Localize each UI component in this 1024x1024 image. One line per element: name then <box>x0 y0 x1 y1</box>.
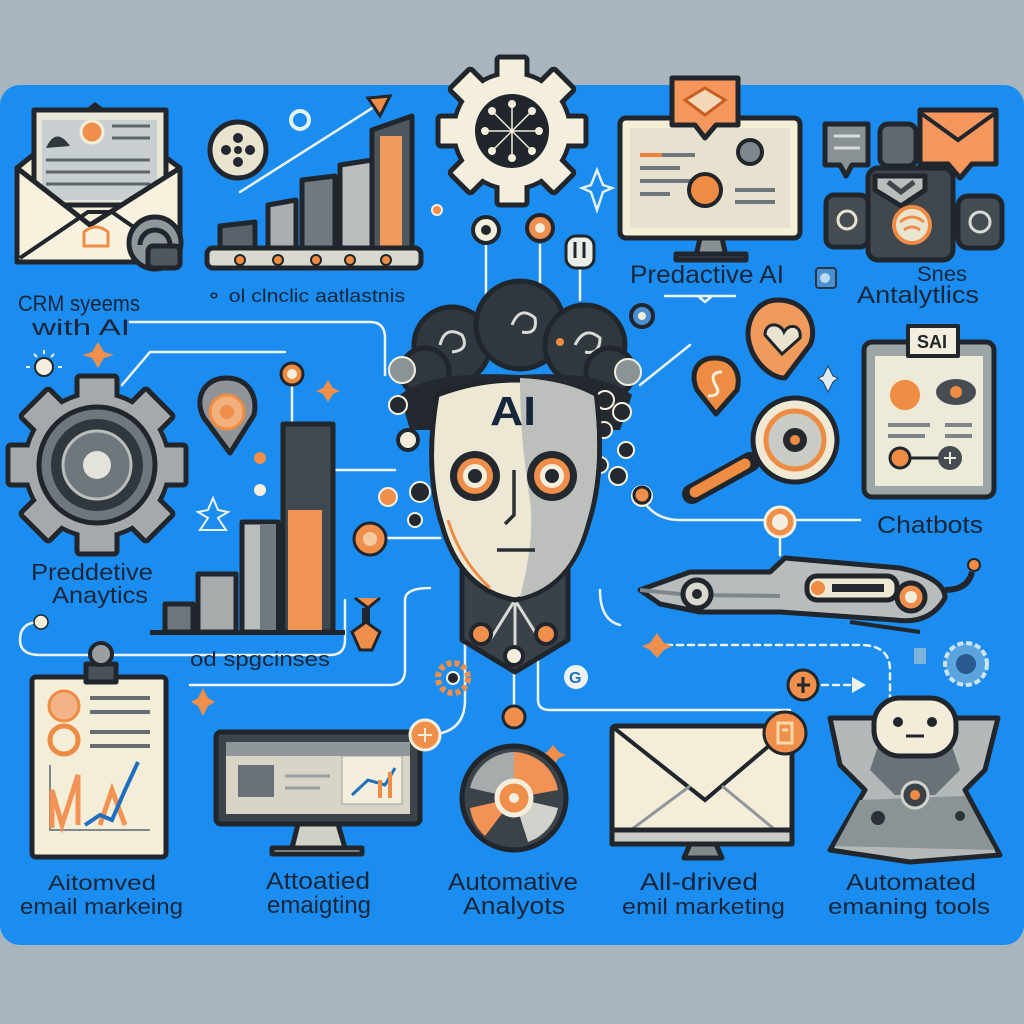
heading: Preddetive Anaytics: Anaytics <box>52 582 148 608</box>
icon: pie disc <box>462 746 566 850</box>
heading: Preddetive Anaytics: Preddetive <box>31 559 153 585</box>
heading: Aitomved email marketing <box>20 872 183 919</box>
neck nodes <box>471 624 556 665</box>
icon: robot machine <box>830 698 1000 862</box>
AI robot head <box>379 281 652 672</box>
icon: tool device <box>640 558 980 632</box>
small square icon <box>816 268 836 288</box>
icon: apps cluster <box>825 110 1002 260</box>
icon: gear left <box>8 376 186 554</box>
icon: blue gear badge <box>914 643 987 685</box>
icon: pin small <box>694 358 738 414</box>
connector lines <box>20 245 890 735</box>
eyes <box>450 451 577 501</box>
heading: Aitomved email marketing: Aitomved <box>48 872 156 895</box>
icon: envelope monitor <box>612 712 806 858</box>
heading: Predactive AI: Predactive AI <box>630 261 784 289</box>
heading: Automated emaning tools: Automated <box>846 869 976 895</box>
label: od specinses: od spgcinses <box>190 649 330 671</box>
icons: left small accents <box>26 342 340 530</box>
icon: tablet SAI: SAI <box>917 332 947 352</box>
heading: Snes Analytlics: Snes <box>917 263 967 286</box>
heading: Attoatied emaigting: emaigting <box>267 892 371 919</box>
heading: All-drived emil marketing: emil marketing <box>622 894 785 919</box>
icon: monitor left <box>216 732 420 854</box>
arrowhead <box>852 677 866 693</box>
heading: CRM systems with AI <box>18 291 140 340</box>
AI text: AI <box>490 388 536 434</box>
heading: Snes Analytlics <box>857 263 979 309</box>
heading: Preddetive Anaytics <box>31 559 153 608</box>
heading: Automated emaning tools: emaning tools <box>828 894 990 919</box>
left bottom accents <box>410 633 818 765</box>
heading: Attoatied emaigting <box>266 868 371 919</box>
icon: magnifier <box>692 398 837 494</box>
heading: Automated emaning tools <box>828 869 990 919</box>
face <box>432 380 600 600</box>
node <box>281 363 303 385</box>
chart: growth bars on conveyor <box>207 96 421 268</box>
node <box>354 523 386 555</box>
icon: predictive AI monitor <box>620 78 800 260</box>
heading: Chatbots: Chatbots <box>877 512 983 539</box>
neck <box>462 570 568 672</box>
heading: All-drived emil marketing: All-drived <box>640 869 758 896</box>
side beads <box>379 357 652 527</box>
node <box>634 487 795 537</box>
icon: envelope CRM <box>17 105 181 269</box>
heading: Snes Analytlics: Antalytlics <box>857 282 979 309</box>
head curls <box>400 281 634 430</box>
left bottom accents: G <box>569 670 581 687</box>
icon: top gear <box>438 57 586 205</box>
heading: Automative Analyots: Automative <box>448 869 578 896</box>
small sparkle <box>582 170 612 210</box>
icon: tablet SAI <box>864 326 994 497</box>
sparkle <box>818 366 838 392</box>
connector nodes <box>432 205 594 268</box>
icon: pin <box>200 378 255 453</box>
icon: small bow figure <box>352 598 380 650</box>
heading: CRM systems with AI: CRM syeems <box>18 291 140 316</box>
chart: predictive bars <box>150 424 345 635</box>
nose and mouth <box>497 470 535 550</box>
heading: Automative Analyots <box>448 869 578 920</box>
label: clinic analytics: ⚬ ol clnclic aatlastnis <box>205 286 405 306</box>
small circle node <box>631 305 653 327</box>
heading: Attoatied emaigting: Attoatied <box>266 868 370 895</box>
heading: Automative Analyots: Analyots <box>463 893 565 920</box>
heading: All-drived emil marketing <box>622 869 785 919</box>
node <box>34 615 48 629</box>
icon: location pin orange <box>748 300 813 378</box>
heading: Aitomved email marketing: email markeing <box>20 894 183 919</box>
icon: clipboard chart <box>32 643 166 857</box>
small sparkle <box>191 688 215 716</box>
heading: CRM systems with AI: with AI <box>30 315 130 340</box>
